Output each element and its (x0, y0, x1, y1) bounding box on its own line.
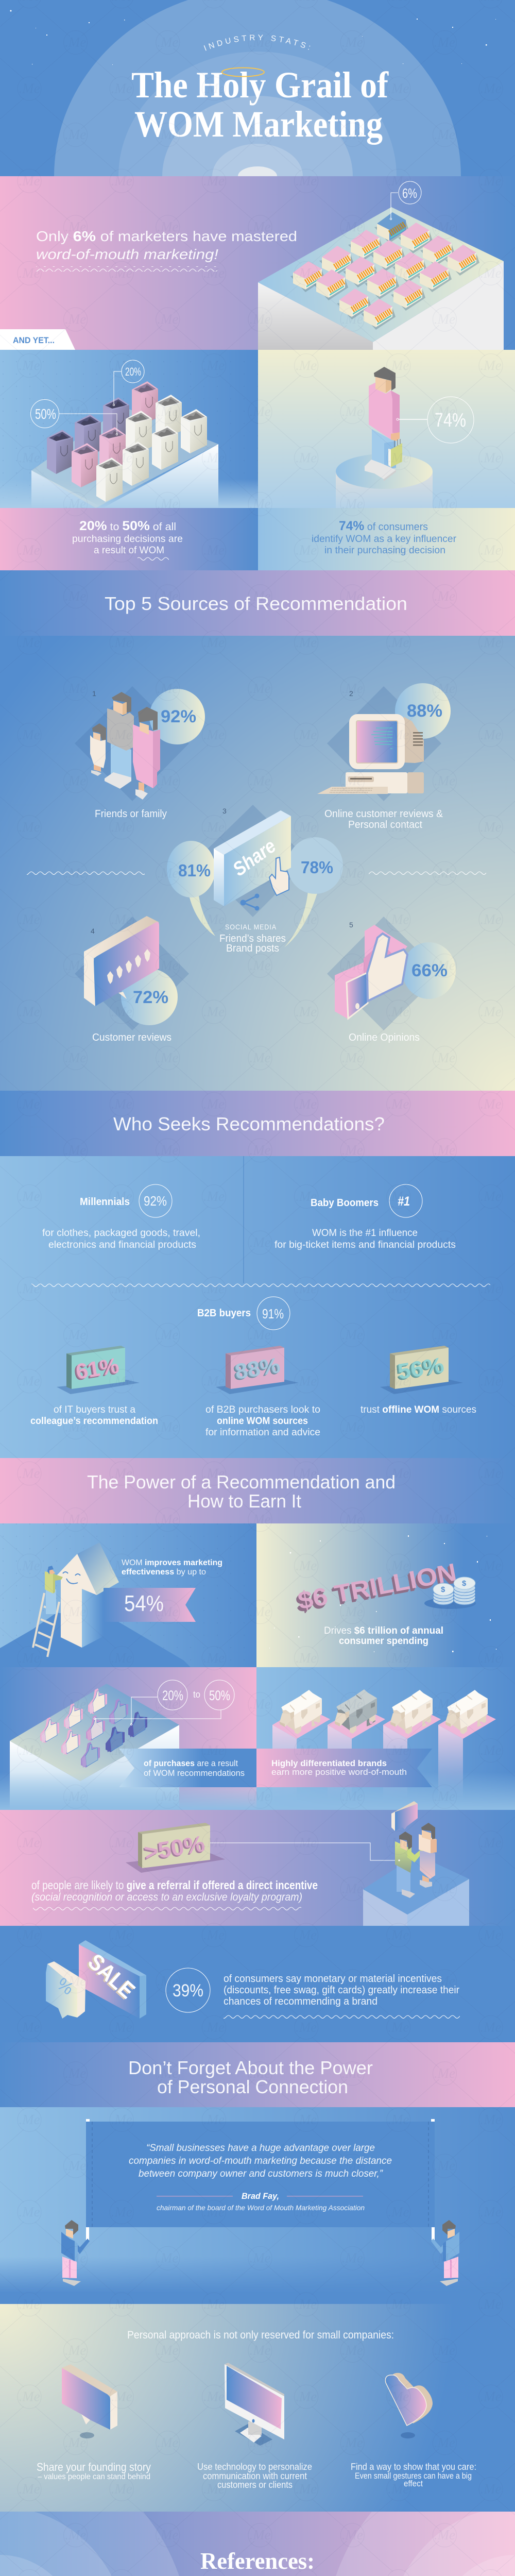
source 2: online reviews: 2 (349, 689, 353, 698)
caption: show you care: Find a way to show that you care: (351, 2462, 476, 2472)
millennials block: electronics and financial products (48, 1240, 196, 1250)
caption: founding story: – values people can stand behind (38, 2472, 150, 2481)
statement: of people are likely to give a referral if offered a direct incentive (31, 1878, 318, 1892)
highlighted blue shop (374, 212, 409, 243)
caption: 61%: of IT buyers trust a (54, 1404, 135, 1415)
panel: personal approach (0, 2304, 515, 2512)
stars (10, 10, 496, 65)
callout: 6% (390, 181, 421, 220)
millennials block (42, 1184, 200, 1250)
panel: differentiated brands (256, 1667, 515, 1810)
source 4: customer reviews: 4 (91, 927, 95, 935)
caption: 88%: of B2B purchasers look to (205, 1404, 320, 1415)
icon: coin stacks: $ (441, 1585, 445, 1594)
ribbon: 54% (104, 1588, 196, 1622)
icon: smiling arrow (56, 1543, 119, 1648)
stat sign: 88%: 88% (231, 1354, 280, 1385)
panel: thumbs 20% to 50% of purchases (0, 1667, 256, 1810)
statement text: word-of-mouth marketing! (36, 246, 218, 262)
source 3: social media: 3 (222, 807, 227, 815)
attribution: Brad Fay, (242, 2191, 279, 2201)
stat sign: 61% (57, 1346, 140, 1394)
source 4: customer reviews (75, 916, 189, 1043)
icon: percent bubble: % (53, 1974, 77, 1999)
panel: shopping bags 20% to 50% (0, 350, 258, 508)
heading: References: (200, 2548, 315, 2574)
source 5: online opinions: 5 (349, 921, 353, 929)
stat sign: 88%: 88% (233, 1353, 282, 1384)
icon: review speech bubble (84, 916, 159, 1006)
icon: speech bubble (62, 2364, 117, 2438)
family figures (90, 692, 160, 800)
stat sign: over 50%: >50% (141, 1832, 205, 1867)
stat sign: 56%: 56% (396, 1352, 445, 1384)
icon: sale card (79, 1940, 146, 2019)
caption: technology: communication with current (203, 2471, 307, 2481)
icon: sale card: SALE (81, 1950, 138, 2004)
caption: 74% of consumers (258, 508, 515, 570)
bottom fade (0, 1772, 515, 1810)
stat bubble 88% (395, 683, 451, 739)
tab: and yet (0, 329, 75, 350)
source 5: online opinions: Online Opinions (349, 1032, 420, 1043)
cylinder platform (336, 454, 433, 508)
stat bubble 72% (121, 969, 178, 1025)
shop grid (290, 223, 479, 330)
statement: consumer spending (339, 1636, 428, 1647)
callout: 50%: 50% (35, 406, 56, 422)
statement: WOM improves marketing (122, 1558, 222, 1567)
3d headline: $6 TRILLION (295, 1561, 457, 1617)
icon: golden halo (222, 68, 264, 76)
statement text (36, 228, 297, 262)
caption: 74% of consumers: 74% of consumers (339, 519, 428, 533)
source 1: friends or family (75, 686, 205, 820)
ribbon: of purchases: of purchases are a result (144, 1758, 238, 1768)
concentric domes (54, 0, 461, 176)
caption: founding story: Share your founding story (37, 2461, 151, 2473)
stat sign: 88%: 88% (232, 1353, 281, 1384)
stat circle: 39% (166, 1968, 210, 2012)
panel: $6 trillion (256, 1523, 515, 1667)
heading: who seeks recommendations (0, 1091, 515, 1156)
stat bubble 81%: 81% (178, 861, 211, 880)
millennials block: Millennials (80, 1196, 130, 1208)
callouts: 20% to 50%: 50% (209, 1688, 230, 1703)
stat sign: 61%: 61% (74, 1353, 121, 1384)
callouts: 20% to 50%: 20% (162, 1688, 183, 1703)
callout: 6%: 6% (402, 185, 417, 201)
attribution: chairman of the board of the Word of Mouth Marketing Association (157, 2204, 365, 2212)
sheep stems and bases (272, 1706, 496, 1801)
caption: 88%: online WOM sources (217, 1416, 308, 1427)
stat bubble 66%: 66% (411, 961, 448, 980)
caption: 88% (205, 1404, 320, 1438)
curved eyebrow text: INDUSTRY STATS: (204, 35, 310, 50)
plateau (31, 407, 218, 508)
b2b buyers: B2B buyers (197, 1308, 251, 1319)
stat sign: 61%: 61% (72, 1354, 119, 1385)
baby boomers block: for big-ticket items and financial products (274, 1240, 456, 1250)
heading: top 5 sources: Top 5 Sources of Recommendation (105, 593, 407, 614)
caption: 56%: trust offline WOM sources (360, 1404, 476, 1415)
icon: heart (385, 2373, 433, 2438)
source 3: social media (167, 805, 343, 954)
heading: the power of a recommendation: The Power of a Recommendation and (87, 1471, 396, 1493)
heading: personal connection: of Personal Connection (157, 2076, 348, 2097)
caption: founding story (37, 2461, 151, 2481)
social media labels: Brand posts (226, 943, 279, 954)
statement: effectiveness by up to (122, 1568, 206, 1577)
icon: retro computer (317, 714, 424, 794)
baby boomers block: Baby Boomers (311, 1197, 379, 1209)
source 2: online reviews: Personal contact (348, 819, 422, 831)
panel: references (0, 2512, 515, 2576)
figure: left banner holder (61, 2220, 90, 2286)
ribbon: differentiated brands (256, 1749, 432, 1787)
stars (269, 1535, 496, 1652)
icon: share card (214, 810, 291, 906)
panel: top 5 sources body (0, 636, 515, 1091)
panel: 39% incentives (0, 1926, 515, 2042)
title: WOM Marketing (134, 104, 383, 145)
statement (324, 1625, 443, 1647)
source 1: friends or family: Friends or family (95, 808, 167, 820)
quote text: companies in word-of-mouth marketing because the distance (129, 2156, 392, 2166)
heading: personal connection: Don’t Forget About the Power (128, 2057, 373, 2078)
stat sign: 56%: 56% (395, 1353, 444, 1384)
source 2: online reviews (317, 683, 451, 831)
baby boomers block: WOM is the #1 influence (312, 1228, 418, 1239)
caption: technology: customers or clients (217, 2480, 293, 2490)
social media labels (219, 923, 286, 954)
social media labels: SOCIAL MEDIA (225, 923, 277, 931)
statement: Drives $6 trillion of annual (324, 1625, 443, 1636)
icon: coin stacks (424, 1577, 476, 1609)
title (131, 64, 389, 145)
stat bubble 92%: 92% (161, 707, 196, 726)
stat sign: 56%: 56% (394, 1354, 444, 1385)
isometric shopping bags (47, 381, 207, 502)
caption: 74% of consumers: identify WOM as a key influencer (312, 534, 457, 545)
icon: sale card: SALE (83, 1949, 140, 2004)
statement: (discounts, free swag, gift cards) greatly increase their (224, 1985, 459, 1996)
tab: and yet: AND YET... (13, 335, 55, 345)
caption: technology: Use technology to personalize (197, 2462, 312, 2472)
ribbon: differentiated brands: Highly differentiated brands (271, 1758, 387, 1768)
caption: 20% to 50%: a result of WOM (94, 545, 164, 556)
panel: personal approach: Personal approach is not only reserved for small companies: (127, 2329, 394, 2341)
caption: 20% to 50%: purchasing decisions are (72, 534, 183, 545)
source 4: customer reviews: Customer reviews (92, 1032, 171, 1043)
panel: shopper 74% (258, 350, 515, 508)
b2b buyers (197, 1297, 290, 1330)
millennials block: 92% (144, 1193, 167, 1209)
stat bubble 81% (167, 841, 215, 936)
heading: who seeks recommendations: Who Seeks Recommendations? (113, 1113, 385, 1134)
panel: quote (0, 2107, 515, 2304)
caption: show you care: effect (404, 2479, 423, 2488)
icon: share nodes (240, 893, 260, 911)
icon: thumbs up (335, 925, 407, 1019)
leader line (210, 1843, 398, 1860)
heading: top 5 sources (0, 570, 515, 636)
plateau with thumbs (10, 1684, 179, 1810)
statement (31, 1878, 318, 1903)
millennials block: for clothes, packaged goods, travel, (42, 1228, 200, 1239)
stat sign: 56% (380, 1346, 463, 1394)
figure on ladder (33, 1566, 63, 1657)
caption: 88%: for information and advice (205, 1427, 320, 1438)
platform (363, 1855, 469, 1926)
heading: the power of a recommendation: How to Earn It (187, 1490, 301, 1512)
stat sign: over 50% (126, 1823, 225, 1873)
stat bubble 88%: 88% (407, 701, 442, 721)
banner with quote (86, 2119, 435, 2227)
stat circle: 39%: 39% (173, 1981, 203, 2001)
stat sign: 88% (216, 1346, 299, 1394)
quote text: “Small businesses have a huge advantage over large (146, 2143, 375, 2154)
caption: technology (197, 2462, 312, 2490)
baby boomers block: #1 (398, 1194, 410, 1209)
isometric shop plateau (258, 207, 504, 350)
callouts: 20% to 50%: to (193, 1689, 200, 1700)
statement: of consumers say monetary or material incentives (224, 1973, 442, 1985)
callout: 50% (31, 400, 118, 435)
source 1: friends or family: 1 (92, 689, 96, 698)
panel: only 6% of marketers (0, 176, 515, 350)
icon: share card: Share (229, 835, 280, 880)
statement (122, 1558, 222, 1577)
stat sign: 61%: 61% (73, 1354, 120, 1384)
b2b buyers: 91% (262, 1306, 284, 1321)
stat bubble 66% (402, 942, 456, 999)
caption: 20% to 50%: 20% to 50% of all (79, 519, 176, 533)
speech bubble (391, 1801, 418, 1831)
icon: desktop monitor (225, 2363, 284, 2446)
source 5: online opinions (327, 917, 456, 1043)
social media labels: Friend’s shares (219, 933, 286, 944)
callout: 74%: 74% (435, 410, 466, 431)
shopper figure (365, 367, 402, 481)
title: The Holy Grail of (131, 64, 389, 106)
icon: coin stacks: $ (462, 1579, 467, 1588)
statement (224, 1973, 459, 2007)
statement text: Only 6% of marketers have mastered (36, 228, 297, 244)
panel: direct incentive over 50% (0, 1801, 515, 1926)
side arcs (0, 2512, 515, 2576)
heading: personal connection (0, 2042, 515, 2107)
baby boomers block (274, 1184, 456, 1250)
ribbon: of purchases (119, 1749, 256, 1787)
stat bubble 78% (284, 837, 343, 947)
stat bubble 78%: 78% (301, 858, 333, 877)
statement: (social recognition or access to an exclusive loyalty program) (31, 1891, 302, 1903)
caption: 61%: colleague’s recommendation (30, 1416, 158, 1427)
ribbon: 54%: 54% (124, 1591, 164, 1616)
caption: 61% (30, 1404, 158, 1427)
section: hero header (10, 0, 496, 176)
callout: 74% (397, 397, 474, 443)
callout: 20% (113, 360, 144, 406)
figure: right banner holder (431, 2220, 459, 2286)
callout: 20%: 20% (125, 365, 141, 378)
callouts: 20% to 50% (94, 1680, 234, 1725)
ribbon: of purchases: of WOM recommendations (144, 1768, 245, 1778)
source 2: online reviews: Online customer reviews & (324, 808, 443, 820)
quote text: between company owner and customers is much closer,” (139, 2168, 384, 2179)
heading: the power of a recommendation (0, 1458, 515, 1523)
icon: percent bubble (46, 1961, 85, 2019)
statement: chances of recommending a brand (224, 1996, 377, 2007)
quote text (129, 2143, 392, 2179)
talking couple (395, 1823, 437, 1898)
panel: improves effectiveness 54% (0, 1523, 256, 1667)
stat bubble 92% (149, 689, 205, 744)
caption: 74% of consumers: in their purchasing decision (324, 545, 445, 556)
3d headline: $6 TRILLION (294, 1562, 457, 1618)
ribbon: differentiated brands: earn more positive word-of-mouth (271, 1767, 407, 1777)
3d headline: $6 TRILLION (296, 1558, 459, 1615)
icon: blocky sheep (280, 1689, 488, 1734)
stat bubble 72%: 72% (133, 988, 168, 1007)
panel: who seeks body (0, 1156, 515, 1458)
attribution (157, 2191, 365, 2212)
caption: show you care (351, 2462, 476, 2488)
dark mountain (0, 1613, 191, 1667)
stat sign: over 50%: >50% (143, 1831, 207, 1866)
caption: 20% to 50% (0, 508, 258, 570)
caption: show you care: Even small gestures can have a big (355, 2471, 472, 2481)
